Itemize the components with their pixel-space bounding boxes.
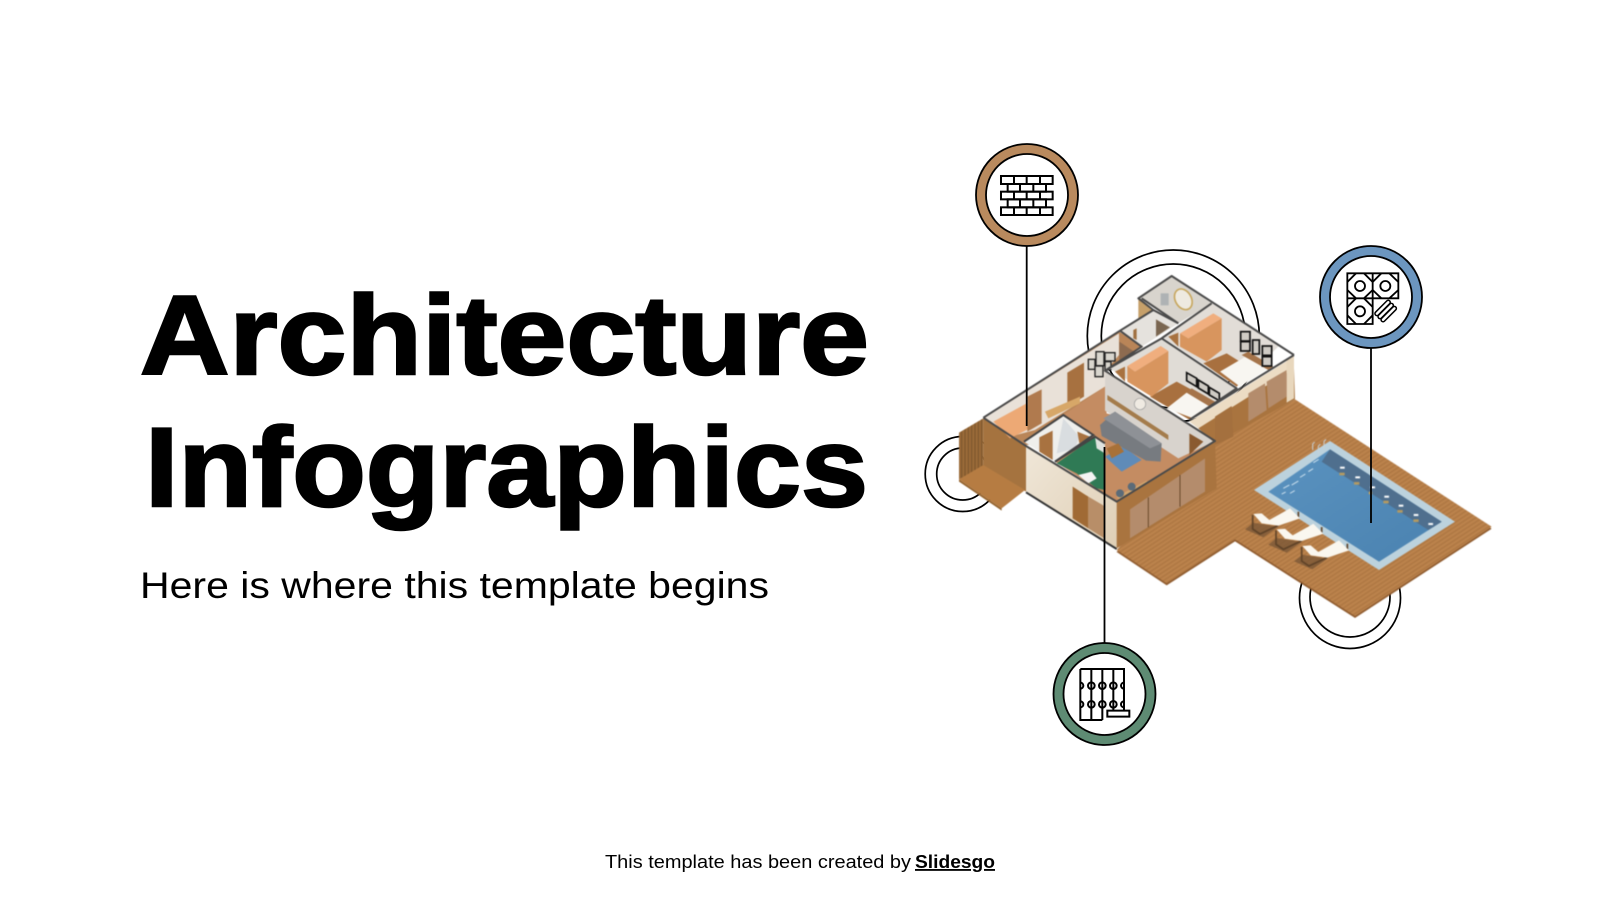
title: Infographics — [145, 405, 868, 530]
title — [140, 273, 869, 530]
connector line: brick — [1026, 245, 1028, 426]
tile material badge — [1320, 246, 1422, 348]
icon: brick wall — [1001, 176, 1053, 215]
outdoor slatted bench — [959, 418, 1026, 511]
panel material badge — [1054, 643, 1156, 745]
icon: patterned tiles — [1347, 273, 1398, 324]
sun loungers — [1245, 508, 1349, 569]
decorative ring: top behind house — [1087, 250, 1259, 422]
decorative ring: bottom — [1300, 548, 1400, 648]
title: Architecture — [140, 273, 869, 398]
isometric house illustration — [959, 276, 1492, 618]
subtitle: Here is where this template begins — [140, 565, 769, 606]
hallway room — [983, 332, 1143, 445]
bathroom and green kitchen — [1024, 415, 1105, 490]
front wooden wall with glazing — [1117, 441, 1217, 548]
lower bedroom — [1110, 338, 1237, 420]
wall picture frames — [1088, 352, 1115, 377]
front cream wall with door — [1026, 445, 1117, 549]
footer credit: This template has been created by — [605, 851, 912, 872]
living room — [1055, 371, 1215, 502]
decorative ring: left — [925, 436, 1000, 512]
small hall and ensuite bathroom — [1120, 276, 1212, 347]
wooden deck — [1117, 399, 1492, 618]
connector line: tiles — [1370, 347, 1372, 523]
connector line: panels — [1104, 447, 1106, 645]
brick material badge — [976, 144, 1078, 246]
house wall outlines — [983, 276, 1294, 502]
icon: wall panels — [1080, 669, 1129, 720]
footer credit: Slidesgo — [915, 851, 995, 872]
upper bedroom — [1162, 303, 1280, 387]
swimming pool — [1254, 439, 1455, 570]
right wing glazed wall — [1189, 355, 1295, 445]
